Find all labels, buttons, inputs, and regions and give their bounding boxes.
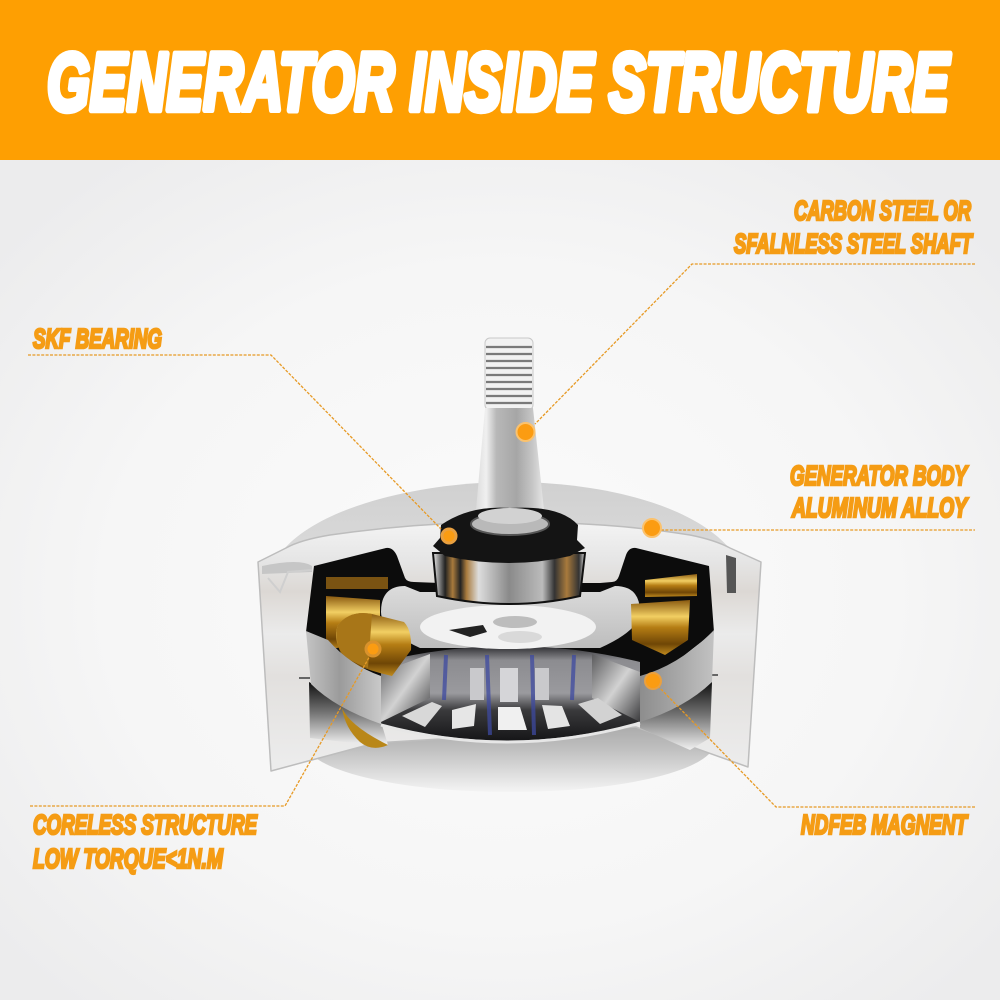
disc holes	[449, 616, 542, 643]
leader: bearing	[28, 355, 441, 529]
shaft thread	[485, 338, 533, 410]
label: bearing: SKF BEARING	[33, 323, 162, 354]
rear magnets	[326, 574, 697, 650]
label: coreless line 2: LOW TORQUE<1N.M	[33, 843, 223, 874]
marker: coreless	[366, 642, 380, 656]
leader: shaft	[535, 264, 975, 424]
right magnet	[631, 600, 690, 655]
marker: magnet	[645, 673, 661, 689]
marker: body	[643, 519, 661, 537]
front ring left	[306, 631, 381, 724]
cavity	[306, 548, 714, 690]
side panels	[381, 654, 640, 722]
callout: coreless	[30, 642, 380, 874]
ground shadow	[305, 692, 715, 792]
callout: body	[643, 460, 975, 537]
rotor plate	[381, 586, 640, 648]
winding lines	[444, 655, 574, 735]
callout: magnet	[645, 673, 975, 840]
housing wall, cut-away	[258, 522, 761, 771]
marker: bearing	[442, 529, 456, 543]
coil chamber	[381, 646, 640, 741]
bottom rim	[381, 723, 640, 742]
wall notch and pins	[262, 555, 736, 678]
generator illustration	[258, 338, 761, 792]
shaft base	[478, 508, 542, 524]
bearing black seal	[433, 508, 585, 563]
callout: bearing	[28, 323, 456, 543]
shaft cone	[476, 408, 544, 510]
leader: body	[661, 529, 975, 531]
front left magnet	[336, 613, 411, 676]
leader: coreless	[30, 654, 371, 806]
bearing inner ring	[471, 513, 549, 535]
marker: shaft	[516, 423, 534, 441]
lower cavities	[309, 682, 712, 750]
front ring right	[640, 630, 714, 722]
housing dome	[284, 482, 730, 570]
bearing chrome	[433, 553, 585, 604]
title banner	[0, 0, 1000, 160]
leader: magnet	[656, 684, 975, 807]
white disc	[420, 605, 596, 649]
coils	[402, 668, 622, 730]
callout: shaft	[516, 195, 975, 441]
label: coreless line 1: CORELESS STRUCTURE	[33, 809, 258, 840]
